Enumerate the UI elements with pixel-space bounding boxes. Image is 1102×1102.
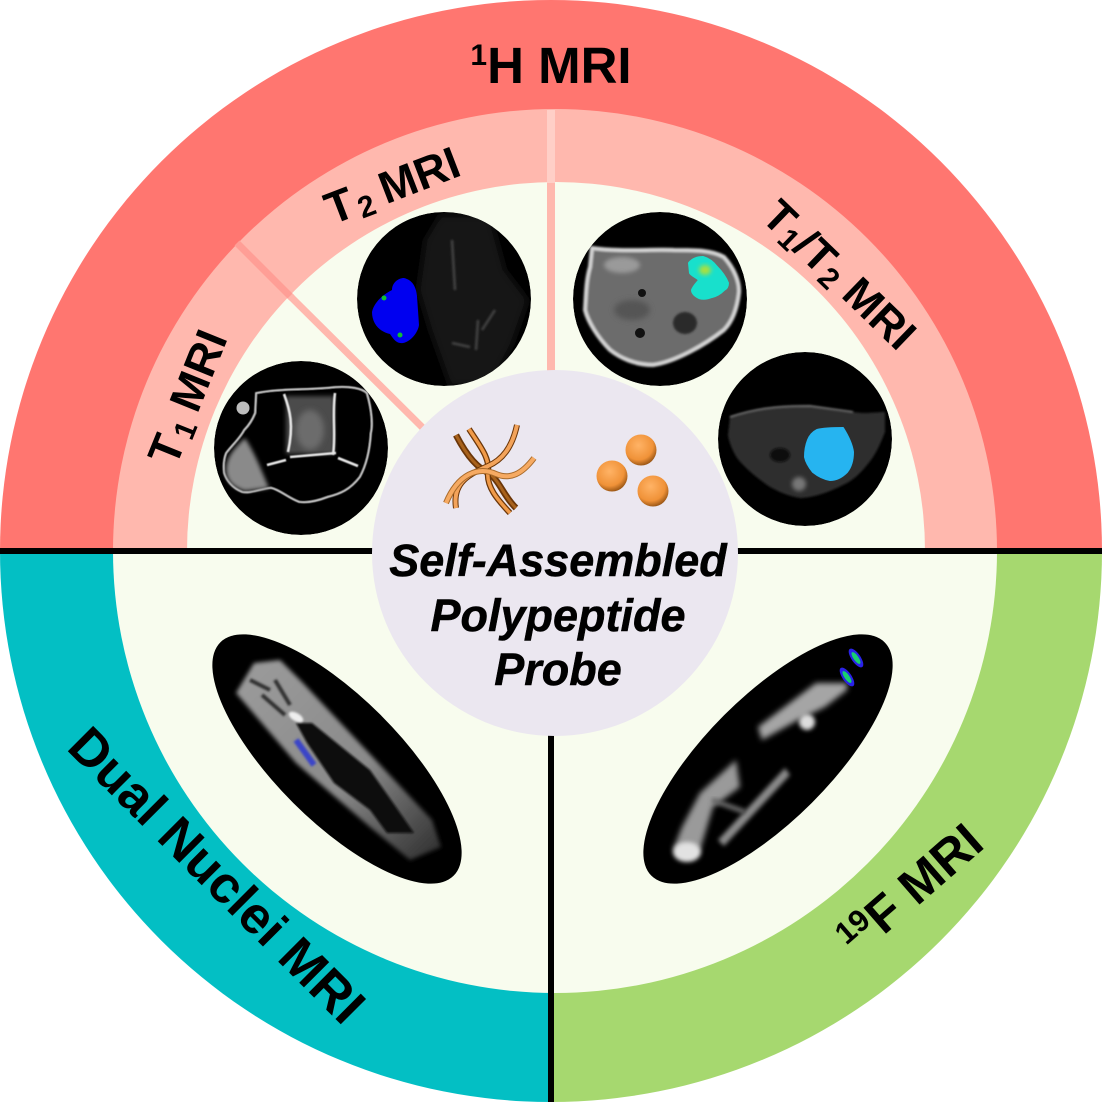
heading: 1H MRI: H MRI [487, 37, 632, 94]
image: T1/T2 MRI liver scan with tumor overlay [573, 212, 747, 386]
heading: T2 MRI: 2 [353, 189, 381, 225]
heading: T1 MRI: T [138, 427, 195, 472]
heading: probe title: Probe [494, 644, 622, 695]
heading: Dual Nuclei MRI: Dual Nuclei MRI [57, 716, 376, 1035]
heading: T1 MRI: 1 [168, 416, 204, 444]
heading: 19F MRI: 19 [828, 902, 877, 951]
image: 19F MRI ellipse scan with hot spots [607, 598, 929, 920]
panel: pale lower interior [113, 551, 997, 993]
divider: T2 and T1/T2 sections [547, 110, 555, 383]
icon: nanoparticle spheres [596, 434, 668, 506]
image: Dual Nuclei MRI ellipse scan [176, 598, 498, 920]
heading: 19F MRI: F MRI [854, 813, 993, 944]
image: T1/T2 MRI abdominal scan with tumor overlay [718, 352, 892, 526]
image: T2 MRI scan with blue overlay [357, 212, 531, 386]
image: T1 MRI scan [214, 361, 388, 535]
heading: probe title [389, 535, 728, 695]
divider: black horizontal and vertical lines [0, 548, 1102, 1102]
panel: Dual Nuclei MRI outer sector [0, 551, 551, 1102]
heading: T1/T2 MRI: /T [784, 221, 846, 283]
heading: T1/T2 MRI: MRI [824, 260, 925, 359]
heading: T1 MRI: MRI [154, 323, 237, 430]
panel: pink T-weighted ring [113, 109, 997, 551]
panel: pale upper interior [187, 182, 925, 551]
icon: polypeptide fibers [446, 425, 534, 513]
panel: 1H MRI outer sector [0, 0, 1102, 551]
heading: probe title: Self-Assembled [389, 535, 728, 586]
divider: T1 and T2 sections [237, 243, 425, 430]
heading: T1/T2 MRI: 1 [771, 222, 806, 258]
panel: 19F MRI outer sector [551, 551, 1102, 1102]
heading: 1H MRI: 1 [470, 39, 487, 72]
heading: T1/T2 MRI: T [753, 191, 806, 245]
heading: probe title: Polypeptide [430, 590, 686, 641]
heading: T1/T2 MRI: 2 [811, 261, 846, 296]
heading: T2 MRI: MRI [360, 137, 467, 218]
panel: central probe circle [372, 370, 738, 736]
heading: T2 MRI: T [318, 177, 362, 234]
